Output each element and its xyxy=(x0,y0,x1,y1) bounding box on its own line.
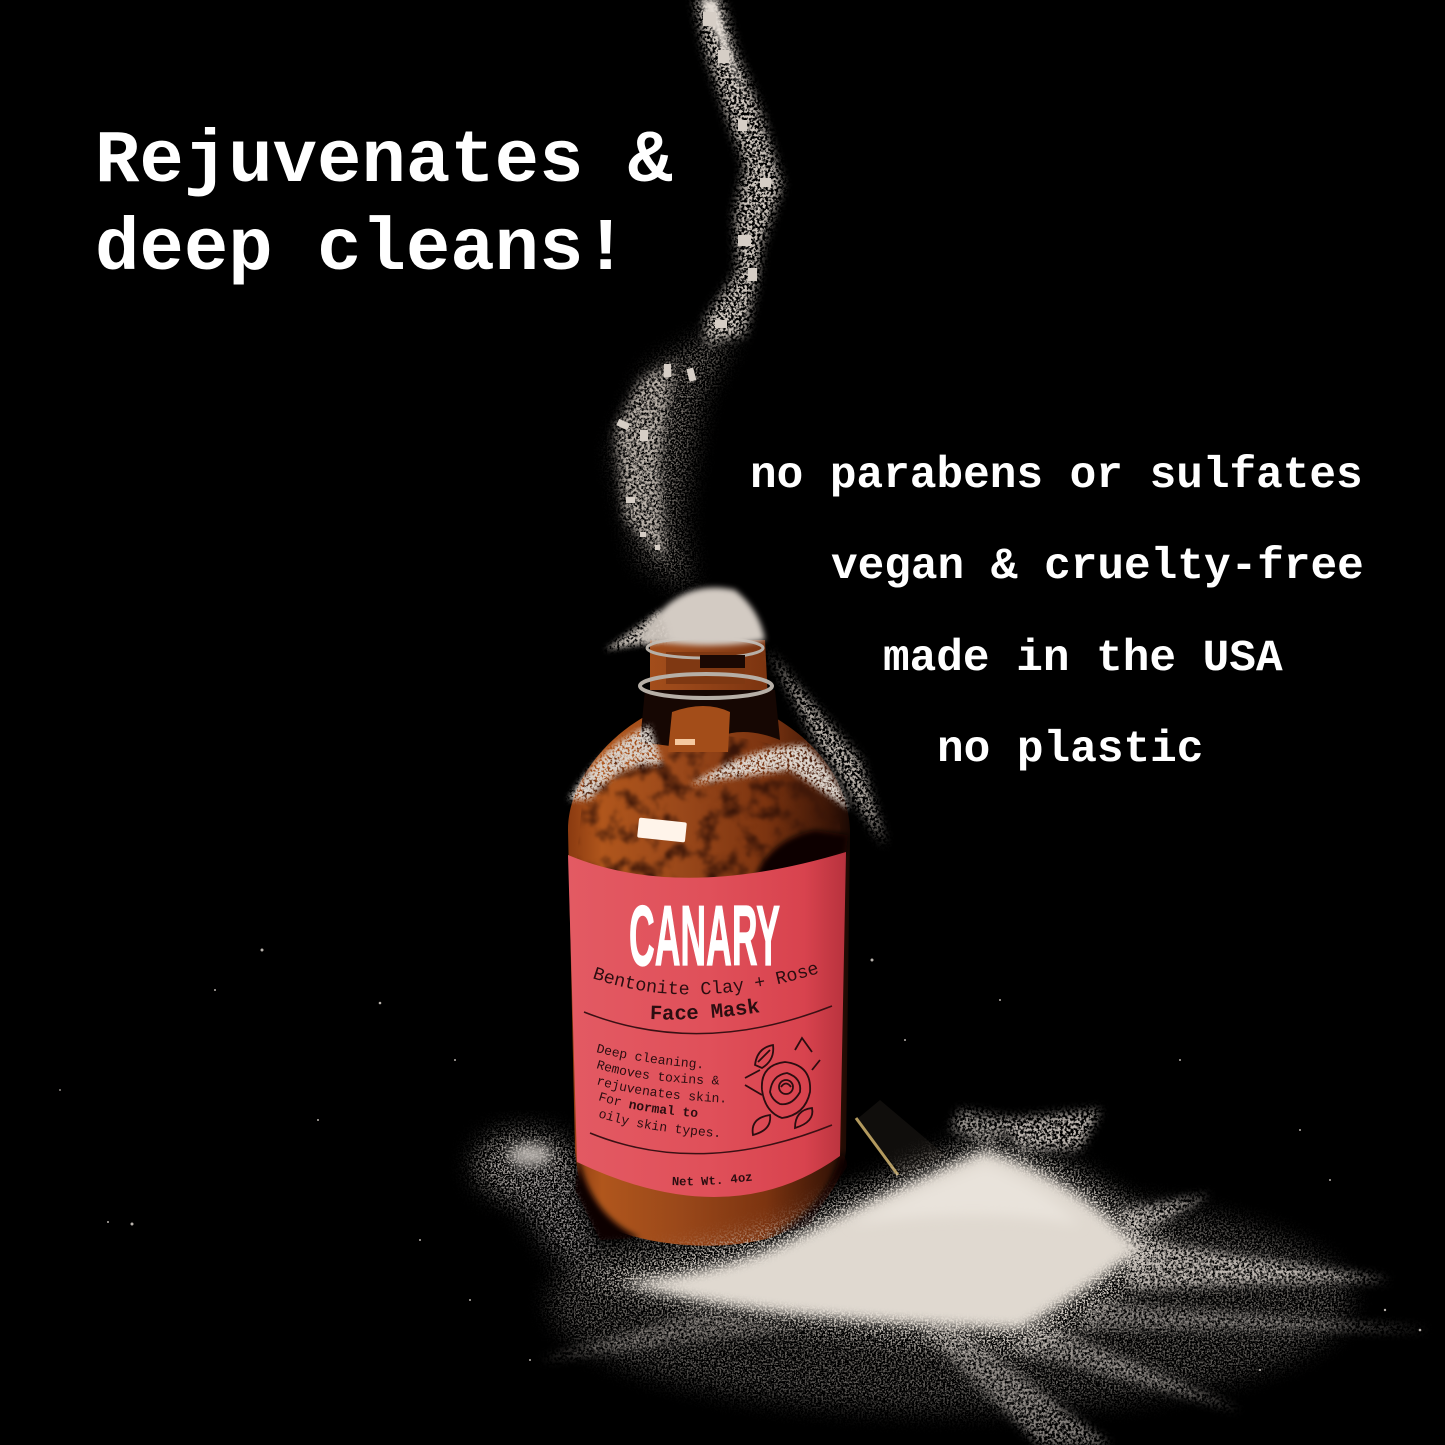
glass rims xyxy=(647,638,763,658)
title: Rejuvenates & xyxy=(95,120,673,204)
description text xyxy=(596,1044,724,1138)
powder haze xyxy=(550,1190,1350,1410)
label paper xyxy=(568,852,846,1197)
glass mottling xyxy=(575,735,845,880)
pile core xyxy=(620,1150,1140,1330)
bottle cap xyxy=(856,1100,945,1178)
pile grain halo xyxy=(570,1135,1170,1355)
description text: Removes toxins & xyxy=(596,1060,720,1084)
feature: no parabens: no parabens or sulfates xyxy=(750,451,1363,501)
description text: For normal to xyxy=(599,1092,698,1117)
feature: vegan: vegan & cruelty-free xyxy=(831,542,1364,592)
powder pile on floor xyxy=(540,1110,1430,1445)
powder behind bottle xyxy=(475,1100,1350,1410)
falling powder stream xyxy=(615,0,782,590)
product name: Net Wt. 4oz xyxy=(672,1174,752,1186)
description text: oily skin types. xyxy=(599,1111,718,1138)
pink label xyxy=(568,852,846,1197)
product name: Bentonite Clay + Rose xyxy=(593,964,818,996)
floor speckles xyxy=(59,948,1421,1371)
spray rays xyxy=(540,1110,1430,1445)
feature: no plastic: no plastic xyxy=(937,725,1203,775)
title xyxy=(95,120,673,292)
description text: Deep cleaning. xyxy=(596,1044,701,1070)
dark bottle base xyxy=(575,1150,848,1240)
bottle body xyxy=(568,640,850,1246)
title: deep cleans! xyxy=(95,208,628,292)
pink label: CANARY xyxy=(629,889,780,984)
dark neck shadow xyxy=(640,690,780,750)
description text: rejuvenates skin. xyxy=(598,1078,724,1102)
product name: Face Mask xyxy=(651,998,760,1020)
feature: USA: made in the USA xyxy=(883,634,1283,684)
powder on bottle shoulders xyxy=(568,725,662,800)
powder mound on bottle mouth xyxy=(640,588,765,646)
icon: rose xyxy=(745,1038,820,1135)
bottle xyxy=(568,588,885,1246)
feature list xyxy=(750,451,1364,775)
dark right patch xyxy=(752,830,848,887)
highlights xyxy=(637,818,687,842)
left puff xyxy=(475,1131,575,1199)
product name xyxy=(593,964,818,1186)
